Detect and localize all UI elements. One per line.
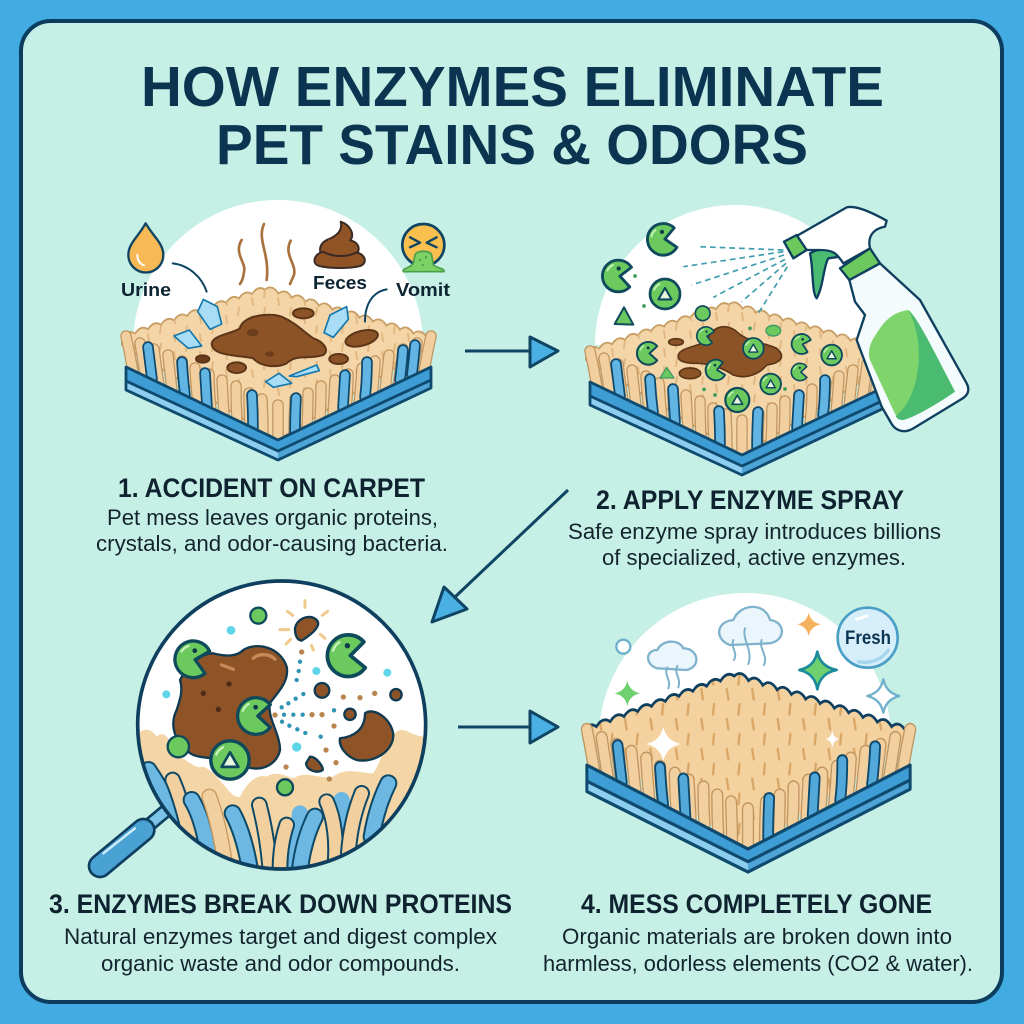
stain blob xyxy=(669,327,781,379)
heading: step 2: 2. APPLY ENZYME SPRAY xyxy=(596,485,904,515)
panel: step 1 illustration xyxy=(121,200,450,460)
text: step 4 description xyxy=(543,924,973,976)
text: step 2 description: of specialized, active enzymes. xyxy=(602,545,906,570)
text: step 3 description xyxy=(64,924,497,976)
enzymes attacking xyxy=(168,608,366,795)
icon: feces xyxy=(314,222,365,268)
text: step 1 description: crystals, and odor-causing bacteria. xyxy=(96,531,448,556)
spray head xyxy=(797,207,887,263)
digestion particles xyxy=(282,662,334,737)
sparkle: white large on carpet xyxy=(646,727,681,761)
label: urine: Urine xyxy=(121,280,171,300)
brown particles xyxy=(275,652,375,779)
carpet xyxy=(122,287,432,460)
sparkle: orange xyxy=(797,613,821,636)
icon: vomit face xyxy=(402,224,444,272)
freshness details xyxy=(615,607,899,761)
enzymes xyxy=(601,222,842,412)
white backdrop circle xyxy=(599,593,891,739)
spray mist xyxy=(683,247,787,313)
arrow: step 2 to step 3 xyxy=(432,490,568,622)
stain blob xyxy=(196,308,380,373)
text: step 4 description: Organic materials are broken down into xyxy=(562,924,952,949)
detail layer: stain, enzymes and spray xyxy=(601,207,968,431)
collar xyxy=(840,248,880,280)
heading: step 3: 3. ENZYMES BREAK DOWN PROTEINS xyxy=(49,889,512,919)
icon: urine drop xyxy=(128,223,163,272)
liquid xyxy=(869,310,955,420)
panel: step 3 magnifier illustration xyxy=(100,581,427,870)
title: HOW ENZYMES ELIMINATE xyxy=(141,55,884,119)
leader line: vomit xyxy=(365,289,387,322)
lens background xyxy=(138,581,426,869)
heading: step 1: 1. ACCIDENT ON CARPET xyxy=(118,473,425,503)
text: step 1 description xyxy=(96,505,448,556)
sparkle: green xyxy=(615,681,640,706)
ring bubble xyxy=(616,640,630,654)
bottle body xyxy=(849,263,968,431)
leader line: urine xyxy=(173,263,207,292)
white backdrop circle xyxy=(595,205,875,345)
text: step 2 description xyxy=(568,519,941,570)
text: step 3 description: organic waste and odor compounds. xyxy=(101,951,460,976)
title: PET STAINS & ODORS xyxy=(216,113,808,177)
white backdrop circle xyxy=(133,200,423,345)
magnified carpet fibers xyxy=(137,730,427,870)
label: feces: Feces xyxy=(313,273,367,293)
nozzle xyxy=(784,235,807,258)
trigger xyxy=(810,250,840,298)
carpet xyxy=(586,302,896,475)
big organic stain xyxy=(173,646,287,769)
lens rim xyxy=(138,581,426,869)
clean carpet xyxy=(583,673,911,872)
label: vomit: Vomit xyxy=(396,280,450,300)
faded odor cloud right xyxy=(719,607,782,665)
odor wavy lines xyxy=(239,224,294,284)
label: fresh: Fresh xyxy=(845,628,891,649)
burst lines xyxy=(280,601,328,650)
text: step 3 description: Natural enzymes target and digest complex xyxy=(64,924,497,949)
sparkle: outline blue xyxy=(867,679,899,713)
sparkle: teal and green xyxy=(799,652,837,689)
faded odor cloud left xyxy=(648,642,696,688)
heading: step 4: 4. MESS COMPLETELY GONE xyxy=(581,889,932,919)
fresh bubble xyxy=(838,608,898,668)
magnifier handle xyxy=(100,812,165,866)
text: step 1 description: Pet mess leaves organic proteins, xyxy=(107,505,438,530)
crystals xyxy=(174,299,348,387)
arrow: step 1 to step 2 xyxy=(465,337,558,367)
title xyxy=(141,55,884,177)
text: step 4 description: harmless, odorless elements (CO2 & water). xyxy=(543,951,973,976)
broken fragments xyxy=(295,617,402,772)
text: step 2 description: Safe enzyme spray introduces billions xyxy=(568,519,941,544)
arrow: step 3 to step 4 xyxy=(458,711,558,743)
panel: step 4 illustration xyxy=(583,593,911,872)
glow dots xyxy=(162,626,391,752)
spray bottle xyxy=(784,207,968,431)
detail layer: mess, crystals and icons xyxy=(128,222,444,387)
panel: step 2 illustration xyxy=(586,205,968,475)
sparkle: white small on carpet xyxy=(825,730,839,748)
